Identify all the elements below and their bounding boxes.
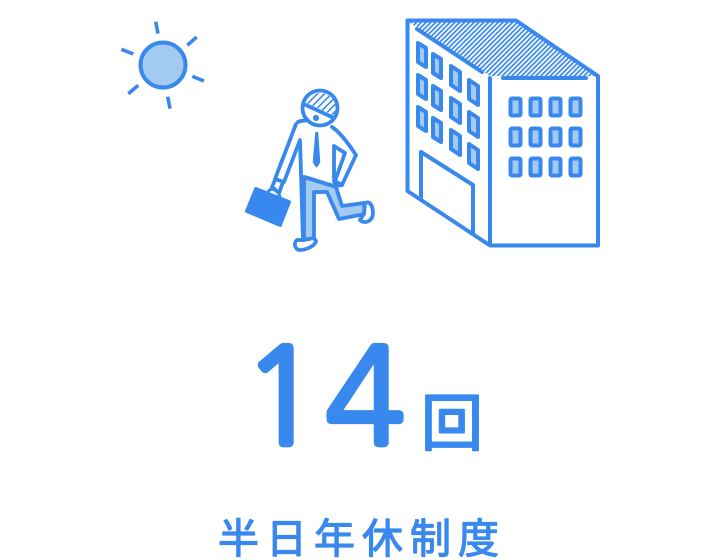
left windows bbox=[418, 43, 478, 169]
tie bbox=[314, 133, 319, 166]
shirt and arms bbox=[275, 124, 303, 240]
icon: businessman walking bbox=[247, 90, 373, 250]
icon: sun bbox=[121, 22, 204, 109]
number: 14 times: 1 bbox=[242, 332, 322, 464]
trousers bbox=[304, 177, 365, 240]
head bbox=[302, 90, 338, 126]
number: 14 times: 回 bbox=[421, 392, 483, 454]
right windows bbox=[510, 98, 580, 176]
briefcase bbox=[247, 189, 289, 225]
front door bbox=[421, 152, 473, 233]
shoes bbox=[295, 238, 316, 250]
number: 14 times bbox=[242, 332, 483, 464]
roof hatching bbox=[409, 22, 597, 76]
hands bbox=[272, 180, 342, 193]
icon: office building bbox=[408, 20, 598, 246]
number: 14 times: 4 bbox=[325, 332, 405, 464]
